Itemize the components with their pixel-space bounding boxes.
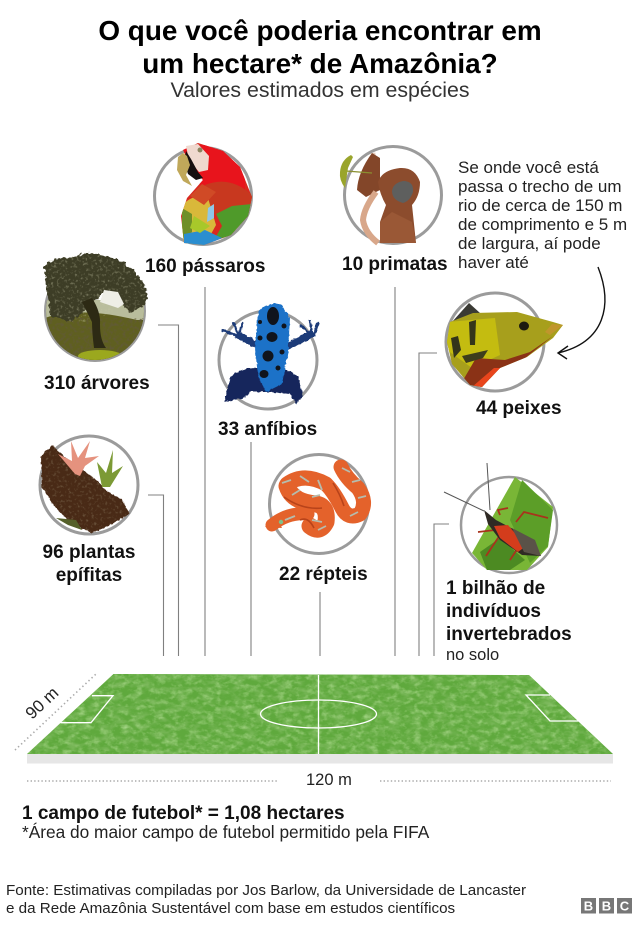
- arrow: [558, 267, 605, 359]
- label: pássaros: 160 pássaros: [145, 256, 265, 277]
- icon: frog: [219, 304, 318, 409]
- BBC logo: [581, 898, 632, 914]
- football field: [20, 670, 620, 764]
- BBC logo: B: [602, 898, 611, 914]
- icon: epiphytes: [40, 436, 138, 534]
- fish note: Se onde você está: [458, 158, 599, 177]
- field depth marker: [15, 674, 96, 750]
- footnote heading: 1 campo de futebol* = 1,08 hectares: [22, 803, 345, 824]
- label: invertebrados: no solo: [446, 646, 499, 664]
- BBC logo: C: [620, 898, 630, 914]
- field depth marker: 90 m: [22, 683, 62, 723]
- label: invertebrados: indivíduos: [446, 601, 541, 622]
- footnote: *Área do maior campo de futebol permitido pela FIFA: [22, 822, 430, 842]
- fish note: haver até: [458, 253, 529, 272]
- fish note: passa o trecho de um: [458, 177, 621, 196]
- source: e da Rede Amazônia Sustentável com base em estudos científicos: [6, 900, 456, 917]
- label: anfíbios: 33 anfíbios: [218, 419, 317, 440]
- label: árvores: 310 árvores: [44, 373, 150, 394]
- icon: macaw: [154, 140, 255, 250]
- icon: snake: [265, 454, 368, 554]
- source: [6, 882, 526, 917]
- fish note: [458, 158, 627, 272]
- label: plantas epífitas: epífitas: [56, 565, 122, 586]
- connector lines: [148, 287, 449, 656]
- title: [98, 15, 542, 79]
- BBC logo: B: [584, 898, 593, 914]
- title: O que você poderia encontrar em: [98, 15, 542, 46]
- label: primatas: 10 primatas: [342, 254, 448, 275]
- label: peixes: 44 peixes: [476, 398, 562, 419]
- label: plantas epífitas: 96 plantas: [43, 542, 135, 563]
- icon: monkey: [340, 146, 442, 244]
- icon: fish: [445, 293, 570, 395]
- label: plantas epífitas: [43, 542, 135, 586]
- label: répteis: 22 répteis: [279, 564, 368, 585]
- icon: tree: [42, 252, 150, 365]
- source: Fonte: Estimativas compiladas por Jos Barlow, da Universidade de Lancaster: [6, 882, 526, 899]
- fish note: rio de cerca de 150 m: [458, 196, 622, 215]
- label: invertebrados: 1 bilhão de: [446, 578, 545, 599]
- label: invertebrados: invertebrados: [446, 624, 572, 645]
- title: um hectare* de Amazônia?: [142, 48, 498, 79]
- subtitle: Valores estimados em espécies: [170, 78, 470, 102]
- field width marker: 120 m: [306, 771, 352, 789]
- label: invertebrados: [446, 578, 572, 664]
- icon: assassin bug on leaf: [444, 463, 557, 573]
- fish note: de largura, aí pode: [458, 234, 601, 253]
- fish note: de comprimento e 5 m: [458, 215, 627, 234]
